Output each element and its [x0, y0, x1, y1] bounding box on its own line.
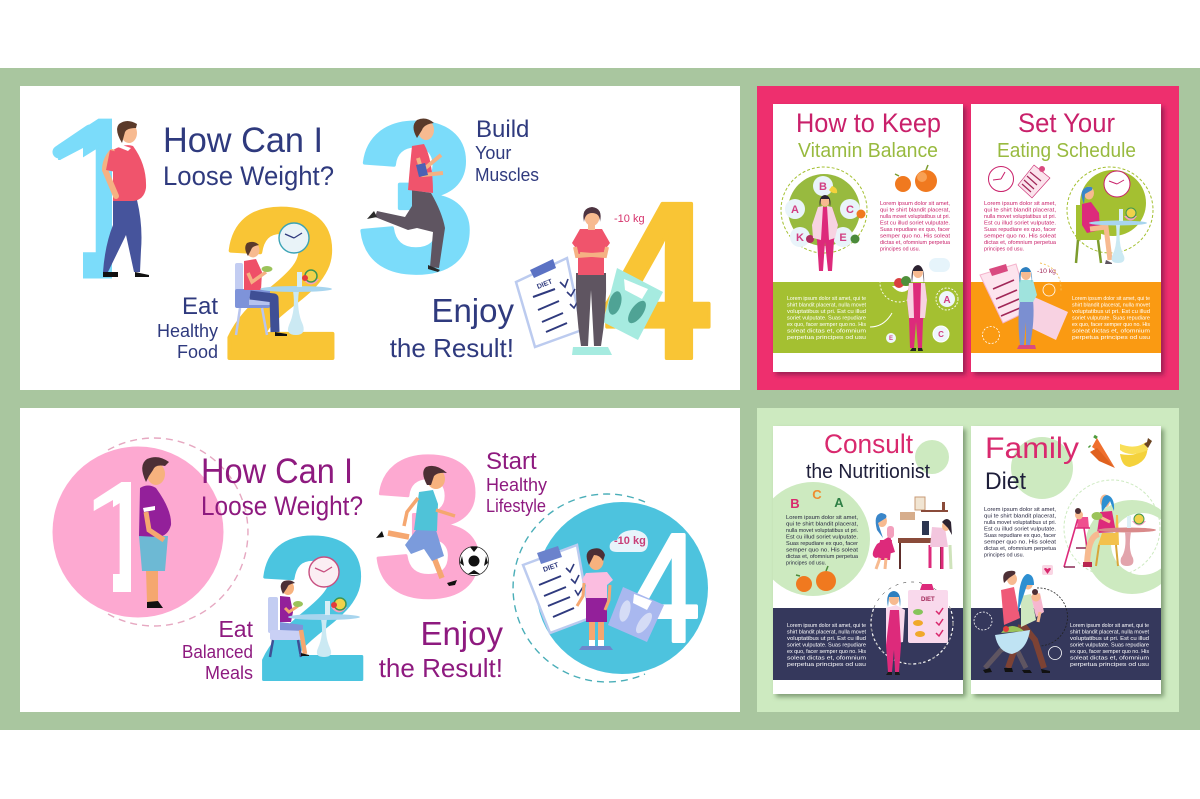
brochure: consult the nutritionist [756, 426, 966, 697]
text block [880, 201, 951, 252]
text: enjoy the result: the Result! [390, 333, 514, 363]
text block: perpetua principes od usu [1070, 662, 1149, 668]
text block [1072, 296, 1151, 341]
icon: heart message [1042, 565, 1053, 575]
heading: Family [985, 432, 1079, 465]
text block: Est cu illud soriet vulputate. [984, 526, 1056, 532]
text block: Lorem ipsum dolor sit amet, qui te [1070, 623, 1149, 629]
text: eat healthy food: Food [177, 342, 218, 362]
icon: carrots [1089, 436, 1115, 468]
label: minus 10 kg: -10 kg [614, 213, 645, 225]
text block: Lorem ipsum dolor sit amet, qui te [1072, 296, 1150, 302]
text block: nulla movet voluptatibus ut pri. [786, 528, 858, 534]
text: enjoy the result: Enjoy [420, 615, 503, 652]
text block: Lorem ipsum dolor sit amet, [984, 201, 1056, 207]
icon: diet clipboard: DIET [536, 278, 554, 291]
heading [806, 429, 930, 483]
number 4: 4 [604, 156, 710, 406]
text block: Lorem ipsum dolor sit amet, [880, 201, 950, 207]
decorative crescent [1085, 500, 1161, 594]
figure: doctor [812, 195, 838, 271]
circle badge 4: 4 [629, 502, 700, 674]
figure: slim boy on scale [577, 548, 613, 650]
heading: how can I lose weight: How Can I [163, 121, 323, 160]
figure: slim woman on scale [572, 207, 612, 355]
icon: clock [279, 223, 309, 253]
icon: diet clipboard [516, 258, 582, 347]
icon: diet clipboard [523, 545, 590, 633]
text block: Lorem ipsum dolor sit amet, qui te [787, 623, 866, 629]
illustration: consultation at desk [873, 497, 952, 569]
diagram: vitamin circle: A [791, 204, 799, 216]
text: start healthy lifestyle: Start [486, 448, 537, 475]
diagram: vitamin circle: B [819, 181, 827, 193]
panel: pink and teal steps [20, 408, 740, 724]
panel: green brochures [756, 408, 1179, 712]
diagram: vitamin circle: C [846, 204, 854, 216]
text block: voluptatibus ut pri. Est cu illud [1070, 636, 1149, 642]
text: enjoy the result: Enjoy [431, 292, 514, 329]
text block [787, 623, 867, 668]
text: eat balanced meals [182, 616, 254, 683]
heading: Diet [985, 468, 1026, 495]
text block: principes od usu. [880, 246, 920, 252]
figure: running man [367, 119, 445, 272]
text block: voluptatibus ut pri. Est cu illud [1072, 309, 1150, 315]
text: enjoy the result [379, 615, 503, 683]
icon: oranges [895, 165, 937, 192]
text block: soriet vulputate. Suas repudiare [787, 316, 866, 322]
text block: ex quo, facer semper quo no. His [1070, 649, 1149, 655]
heading [796, 108, 941, 162]
icon: checklist [1018, 165, 1050, 198]
icon: vitamin badges: E [889, 336, 893, 342]
text block: dictas et, ofomnium perpetua [984, 240, 1057, 246]
text block: soleat dictas et, ofomnium [787, 656, 867, 662]
text block: nulla movet voluptatibus ut pri. [984, 214, 1056, 220]
text block: ex quo, facer semper quo no. His [787, 649, 866, 655]
text block: soriet vulputate. Suas repudiare [787, 642, 866, 648]
text block: qui te shirt blandit placerat, [984, 514, 1056, 520]
illustration: nutritionist with diet chart [871, 582, 953, 675]
text block: qui te shirt blandit placerat, [786, 522, 858, 528]
illustration: family walking [974, 571, 1068, 673]
icon: vitamin badges: A [943, 295, 951, 306]
text block: nulla movet voluptatibus ut pri. [984, 520, 1056, 526]
circle badge 4 [513, 494, 708, 682]
text block: perpetua principes od usu [787, 662, 866, 668]
illustration: mother feeding child [1064, 480, 1160, 576]
text block: ex quo, facer semper quo no. His [1072, 322, 1150, 328]
vitamin letters [790, 487, 844, 511]
brochure: eating schedule [971, 104, 1164, 375]
text: build your muscles: Your [475, 143, 511, 163]
text block: Lorem ipsum dolor sit amet, qui te [787, 296, 866, 302]
icon: vitamin badges [870, 288, 958, 343]
text block: soleat dictas et, ofomnium [1072, 328, 1151, 334]
icon: bathroom scale [608, 587, 664, 642]
text block: Lorem ipsum dolor sit amet, [984, 507, 1056, 513]
figure: overweight boy [139, 457, 171, 608]
text block: shirt blandit placerat, nulla movet [787, 302, 866, 308]
circle badge 1: 1 [84, 450, 171, 625]
text block [1070, 623, 1150, 668]
text block: perpetua principes od usu [787, 335, 866, 341]
text block: semper quo no. His soleat [984, 234, 1056, 240]
panel: blue and yellow steps [20, 72, 740, 406]
label: minus 10 kg cloud: -10 kg [614, 535, 646, 547]
text block: soleat dictas et, ofomnium [1070, 656, 1150, 662]
heading: How to Keep [796, 108, 941, 138]
illustration: woman with diet plan and scale: -10 kg [1037, 269, 1056, 275]
label: minus 10 kg cloud [610, 530, 648, 552]
text block: voluptatibus ut pri. Est cu illud [787, 636, 866, 642]
text block: qui te shirt blandit placerat, [880, 208, 950, 214]
text: build your muscles: Muscles [475, 165, 539, 185]
heading: how can I lose weight [163, 121, 334, 191]
text block: ex quo, facer semper quo no. His [787, 322, 866, 328]
text block: dictas et, ofomnium perpetua [786, 554, 859, 560]
text block [787, 296, 867, 341]
text block: Est cu illud soriet vulputate. [984, 220, 1056, 226]
heading: how can I lose weight: Loose Weight? [201, 491, 363, 521]
text block: Suas repudiare ex quo, facer [984, 227, 1056, 233]
icon: diet clipboard: DIET [542, 562, 560, 574]
number 3: 3 [358, 78, 475, 316]
heading: how can I lose weight: How Can I [201, 452, 353, 491]
text block: shirt blandit placerat, nulla movet [787, 630, 866, 636]
vitamin letters: B [790, 496, 800, 511]
text: enjoy the result [390, 292, 514, 363]
text block [786, 515, 859, 566]
circle badge 1 [52, 438, 248, 626]
text block [984, 201, 1057, 252]
text block: semper quo no. His soleat [984, 540, 1056, 546]
text: eat healthy food: Eat [182, 293, 218, 320]
text block: Est cu illud soriet vulputate. [786, 534, 858, 540]
text block: dictas et, ofomnium perpetua [984, 546, 1057, 552]
text block [984, 507, 1057, 558]
text block: semper quo no. His soleat [880, 234, 950, 240]
number 1 [52, 118, 112, 278]
text block: qui te shirt blandit placerat, [984, 208, 1056, 214]
text block: voluptatibus ut pri. Est cu illud [787, 309, 866, 315]
text block: principes od usu. [984, 552, 1024, 558]
text block: nulla movet voluptatibus ut pri. [880, 214, 950, 220]
text: start healthy lifestyle: Healthy [486, 475, 547, 495]
illustration: nutritionist with diet chart: DIET [921, 597, 935, 603]
icon: oranges [796, 566, 836, 592]
text block: principes od usu. [984, 246, 1024, 252]
text block: shirt blandit placerat, nulla movet [1072, 302, 1150, 308]
text: start healthy lifestyle [486, 448, 547, 516]
text block: soleat dictas et, ofomnium [787, 328, 867, 334]
brochure: vitamin balance [773, 104, 966, 375]
text: start healthy lifestyle: Lifestyle [486, 496, 546, 516]
text: eat healthy food [157, 293, 218, 362]
text: eat balanced meals: Eat [218, 616, 254, 642]
heading [997, 108, 1136, 162]
text block: semper quo no. His soleat [786, 548, 858, 554]
heading: Vitamin Balance [798, 140, 938, 162]
text block: perpetua principes od usu [1072, 335, 1150, 341]
heading: how can I lose weight [201, 452, 363, 521]
number 2: 2 [222, 165, 341, 404]
text block: Suas repudiare ex quo, facer [984, 533, 1056, 539]
brochure: family diet [971, 426, 1179, 697]
vitamin letters: C [812, 487, 822, 502]
heading: Eating Schedule [997, 140, 1136, 162]
heading: how can I lose weight: Loose Weight? [163, 161, 334, 191]
diagram: vitamin circle: E [839, 232, 847, 244]
figure: boy eating at table [268, 580, 360, 657]
heading: the Nutritionist [806, 461, 930, 483]
diagram: vitamin circle [781, 167, 867, 253]
number 2: 2 [256, 496, 370, 724]
panel: pink brochures [757, 86, 1179, 390]
heading: Consult [824, 429, 913, 459]
icon: clock [309, 557, 339, 587]
text block: Suas repudiare ex quo, facer [880, 227, 950, 233]
figure: boy kicking ball [376, 466, 488, 586]
icon: vitamin badges: C [938, 330, 944, 339]
text: build your muscles: Build [476, 116, 529, 143]
figure: overweight man [103, 121, 149, 277]
text: build your muscles [475, 116, 539, 185]
text: eat balanced meals: Meals [205, 663, 253, 683]
text block: Lorem ipsum dolor sit amet, [786, 515, 858, 521]
text block: Suas repudiare ex quo, facer [786, 541, 858, 547]
text: enjoy the result: the Result! [379, 653, 503, 683]
heading: Set Your [1018, 108, 1115, 138]
text block: Est cu illud soriet vulputate. [880, 220, 950, 226]
text block: soriet vulputate. Suas repudiare [1070, 642, 1149, 648]
text block: shirt blandit placerat, nulla movet [1070, 630, 1149, 636]
number 1: 1 [44, 72, 171, 326]
illustration: woman eating at table [1067, 167, 1153, 264]
icon: bananas [1120, 438, 1152, 467]
heading [985, 432, 1079, 495]
vitamin letters: A [834, 495, 844, 510]
figure: man eating at table [235, 242, 332, 336]
icon: clock [988, 166, 1014, 192]
text block: dictas et, ofomnium perpetua [880, 240, 951, 246]
text: eat balanced meals: Balanced [182, 642, 253, 662]
illustration: woman with diet plan and scale [980, 263, 1068, 349]
icon: bathroom scale [603, 268, 663, 340]
text: eat healthy food: Healthy [157, 321, 218, 341]
figure: doctor with salad bowl [880, 258, 950, 351]
text block: soriet vulputate. Suas repudiare [1072, 316, 1150, 322]
number 3: 3 [374, 416, 485, 638]
diagram: vitamin circle: K [796, 232, 804, 244]
text block: principes od usu. [786, 560, 826, 566]
